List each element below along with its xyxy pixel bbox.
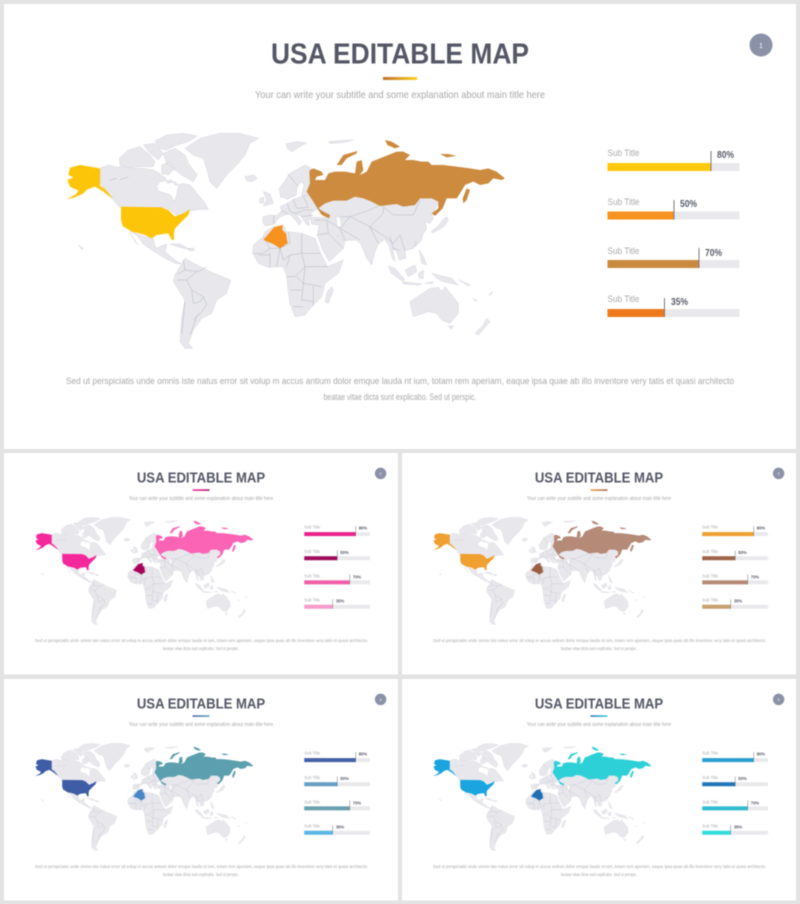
bar: 80%	[702, 751, 768, 762]
bar: 80%: Sub Title	[304, 751, 320, 757]
body paragraph: beatae vitae dicta sunt explicabo. Sed ut perspic.	[561, 646, 637, 652]
bar: 80%: 80%	[717, 150, 734, 161]
page number badge: 1	[759, 43, 763, 50]
bar: 80%	[702, 525, 768, 536]
bar: 35%	[304, 823, 370, 835]
bar: 35%	[304, 597, 370, 609]
title: USA EDITABLE MAP	[137, 697, 266, 713]
body paragraph: beatae vitae dicta sunt explicabo. Sed ut perspic.	[324, 392, 476, 403]
body paragraph	[35, 864, 368, 878]
panel: small slide, blue theme	[4, 679, 398, 900]
page number badge	[375, 694, 386, 705]
bar: 80%: Sub Title	[702, 751, 718, 757]
bar: 80%: 80%	[757, 526, 766, 532]
title accent line	[383, 77, 417, 80]
bar: 80%: 80%	[359, 526, 368, 532]
bar: 35%: Sub Title	[304, 597, 320, 603]
bar: 35%: Sub Title	[304, 823, 320, 829]
subtitle: Your can write your subtitle and some explanation about main title here	[527, 496, 671, 502]
bar: 80%: 80%	[359, 752, 368, 758]
bar: 70%	[702, 799, 768, 810]
bar: 50%	[304, 775, 370, 786]
bar: 70%: Sub Title	[608, 246, 640, 257]
subtitle: Your can write your subtitle and some explanation about main title here	[129, 496, 273, 502]
bar: 35%: Sub Title	[702, 597, 718, 603]
title: USA EDITABLE MAP	[137, 471, 266, 487]
bar: 80%: Sub Title	[608, 148, 640, 159]
bar chart	[608, 148, 740, 317]
bar: 70%: 70%	[353, 574, 362, 580]
bar: 35%	[608, 294, 740, 317]
title accent line	[591, 715, 607, 717]
bar: 50%	[702, 549, 768, 560]
world map	[35, 517, 253, 624]
bar: 50%	[304, 549, 370, 560]
page number badge: 5	[778, 698, 780, 702]
bar: 35%: 35%	[336, 599, 345, 605]
bar: 35%	[702, 597, 768, 609]
page number badge	[773, 694, 784, 705]
panel: small slide, pink theme	[4, 453, 398, 674]
bar: 50%: 50%	[738, 550, 747, 556]
bar: 70%	[608, 246, 740, 268]
bar: 70%	[304, 799, 370, 810]
body paragraph	[433, 638, 766, 652]
title accent line	[193, 715, 209, 717]
bar: 80%	[304, 525, 370, 536]
page number badge: 3	[778, 472, 780, 476]
world map	[35, 743, 253, 850]
page number badge: 2	[380, 472, 382, 476]
bar: 35%: 35%	[336, 825, 345, 831]
bar: 50%: Sub Title	[608, 197, 640, 208]
body paragraph	[66, 376, 734, 403]
title: USA EDITABLE MAP	[535, 697, 664, 713]
bar: 50%: Sub Title	[304, 549, 320, 555]
title: USA EDITABLE MAP	[535, 471, 664, 487]
body paragraph: beatae vitae dicta sunt explicabo. Sed ut perspic.	[561, 872, 637, 878]
body paragraph: beatae vitae dicta sunt explicabo. Sed ut perspic.	[163, 646, 239, 652]
page number badge	[375, 468, 386, 479]
bar: 35%	[702, 823, 768, 835]
bar: 35%: Sub Title	[608, 294, 640, 305]
page number badge	[773, 468, 784, 479]
title: USA EDITABLE MAP	[271, 38, 529, 70]
bar: 80%: Sub Title	[702, 525, 718, 531]
panel: small slide, cyan theme	[402, 679, 796, 900]
world map	[433, 517, 651, 624]
bar: 35%: 35%	[671, 297, 688, 308]
body paragraph	[35, 638, 368, 652]
world map	[433, 743, 651, 850]
panel: main slide, amber theme	[4, 4, 796, 449]
page number badge	[750, 34, 772, 56]
bar: 80%: 80%	[757, 752, 766, 758]
bar: 70%: 70%	[751, 574, 760, 580]
bar: 70%: Sub Title	[702, 573, 718, 579]
bar chart	[304, 525, 370, 609]
world map	[67, 133, 505, 348]
bar chart	[702, 751, 768, 835]
body paragraph: Sed ut perspiciatis unde omnis iste natus error sit volup m accus antium dolor emque lauda nt ium, totam rem aperiam, eaque ipsa quae ab illo inventore very tatis et quasi architecto	[433, 864, 766, 870]
body paragraph: Sed ut perspiciatis unde omnis iste natus error sit volup m accus antium dolor emque lauda nt ium, totam rem aperiam, eaque ipsa quae ab illo inventore very tatis et quasi architecto	[35, 638, 368, 644]
bar: 50%: 50%	[680, 199, 697, 210]
body paragraph: Sed ut perspiciatis unde omnis iste natus error sit volup m accus antium dolor emque lauda nt ium, totam rem aperiam, eaque ipsa quae ab illo inventore very tatis et quasi architecto	[433, 638, 766, 644]
bar: 50%: Sub Title	[304, 775, 320, 781]
bar: 35%: 35%	[734, 825, 743, 831]
bar: 80%: Sub Title	[304, 525, 320, 531]
bar: 70%	[702, 573, 768, 584]
bar: 70%: Sub Title	[304, 799, 320, 805]
bar: 80%	[608, 148, 740, 171]
subtitle: Your can write your subtitle and some explanation about main title here	[255, 89, 545, 101]
bar: 80%	[304, 751, 370, 762]
bar: 70%: 70%	[751, 800, 760, 806]
bar: 50%	[608, 197, 740, 220]
bar chart	[304, 751, 370, 835]
bar: 70%: 70%	[353, 800, 362, 806]
bar: 50%	[702, 775, 768, 786]
body paragraph: Sed ut perspiciatis unde omnis iste natus error sit volup m accus antium dolor emque lauda nt ium, totam rem aperiam, eaque ipsa quae ab illo inventore very tatis et quasi architecto	[35, 864, 368, 870]
body paragraph	[433, 864, 766, 878]
bar: 70%: 70%	[705, 248, 722, 259]
subtitle: Your can write your subtitle and some explanation about main title here	[527, 722, 671, 728]
bar chart	[702, 525, 768, 609]
bar: 35%: 35%	[734, 599, 743, 605]
bar: 50%: 50%	[340, 550, 349, 556]
bar: 50%: 50%	[738, 776, 747, 782]
bar: 35%: Sub Title	[702, 823, 718, 829]
title accent line	[591, 489, 607, 491]
panel: small slide, tan theme	[402, 453, 796, 674]
bar: 70%	[304, 573, 370, 584]
body paragraph: beatae vitae dicta sunt explicabo. Sed ut perspic.	[163, 872, 239, 878]
page number badge: 4	[380, 698, 382, 702]
bar: 50%: Sub Title	[702, 775, 718, 781]
bar: 70%: Sub Title	[702, 799, 718, 805]
bar: 70%: Sub Title	[304, 573, 320, 579]
bar: 50%: Sub Title	[702, 549, 718, 555]
bar: 50%: 50%	[340, 776, 349, 782]
title accent line	[193, 489, 209, 491]
subtitle: Your can write your subtitle and some explanation about main title here	[129, 722, 273, 728]
